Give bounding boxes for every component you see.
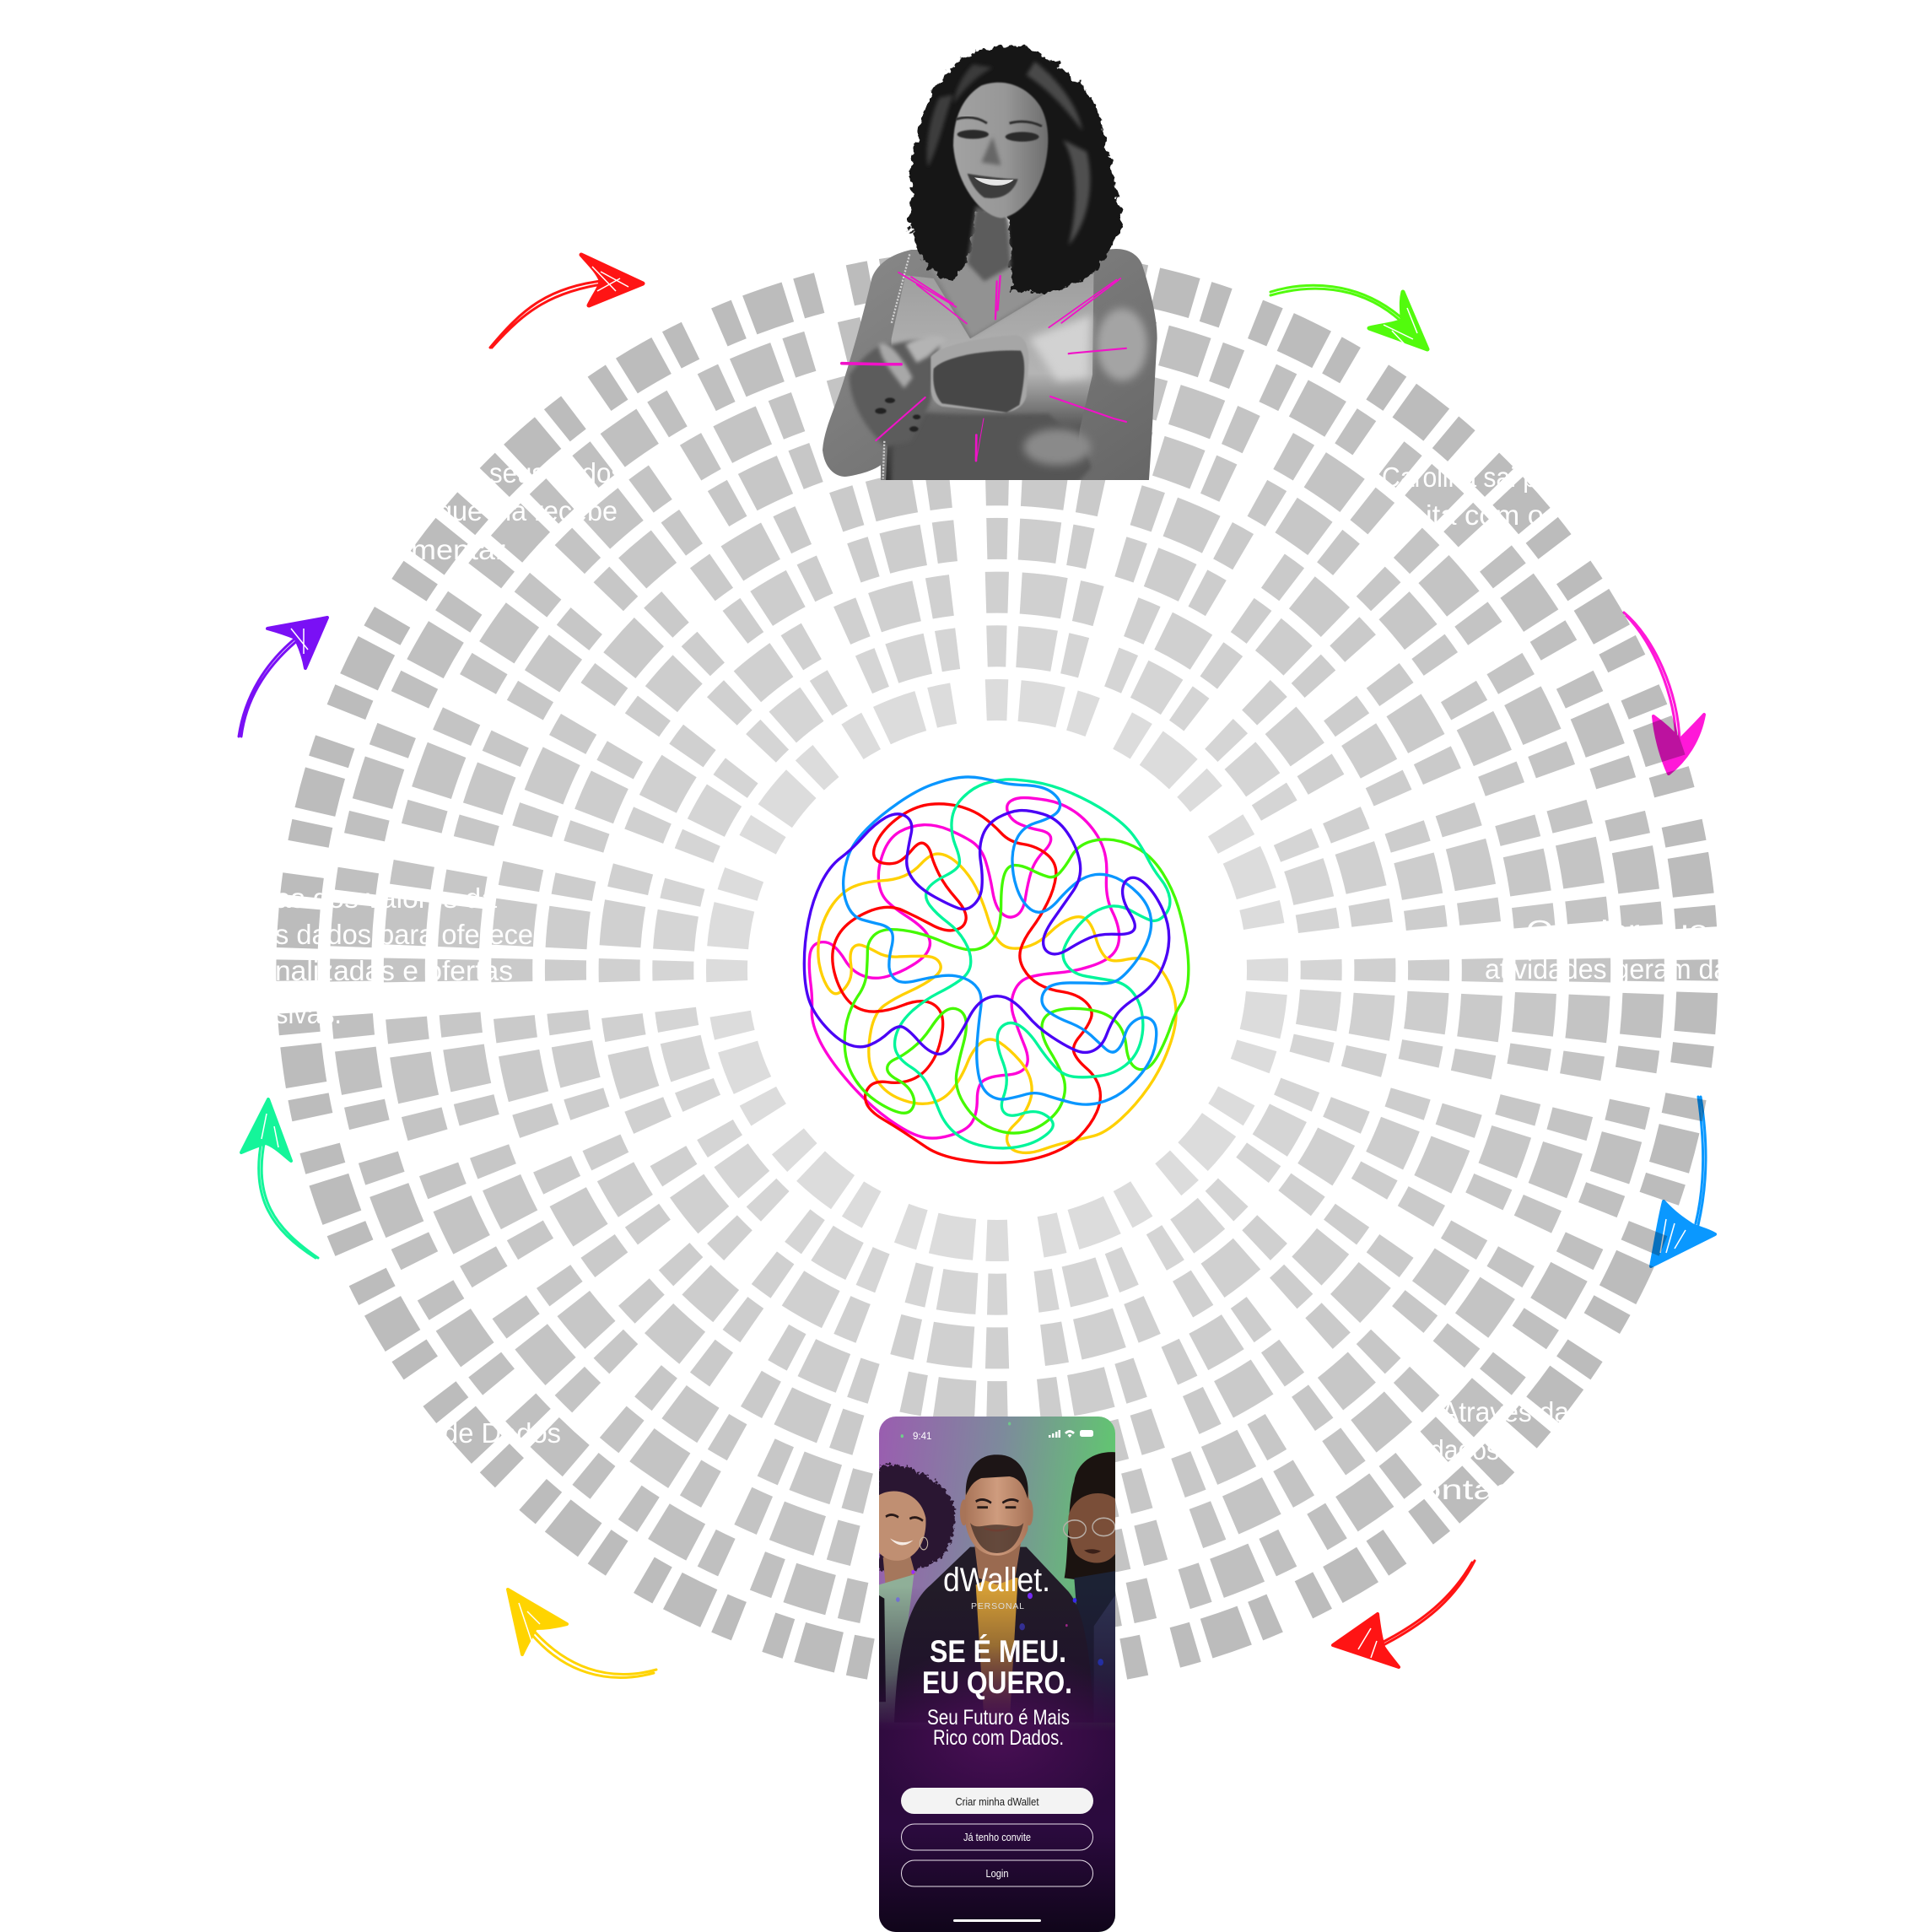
text block: top left: mentar. xyxy=(411,534,512,565)
subheadline: Rico com Dados. xyxy=(933,1726,1064,1750)
headline: EU QUERO. xyxy=(922,1665,1072,1700)
neck xyxy=(968,206,1011,282)
text block: top left: seus dados xyxy=(489,457,624,488)
mouth xyxy=(968,174,1018,198)
text block: left: s dados para oferece xyxy=(275,919,533,950)
left woman xyxy=(879,1465,955,1723)
man xyxy=(894,1454,1094,1723)
nose shade xyxy=(981,137,1001,165)
hair xyxy=(909,45,1122,291)
headline xyxy=(922,1634,1072,1700)
text block: right: atividades geram dados xyxy=(1485,953,1772,985)
text block: left: nalizadas e ofertas xyxy=(275,955,513,986)
dark fade overlay xyxy=(879,1586,1115,1932)
button: invite: Já tenho convite xyxy=(963,1832,1031,1843)
button: login: Login xyxy=(985,1868,1009,1880)
spark lines xyxy=(842,273,1126,461)
right arm light patch xyxy=(1097,309,1147,380)
radial tile wheel xyxy=(297,270,1697,1670)
fingers xyxy=(879,343,913,388)
person: woman looking at her phone xyxy=(823,45,1157,483)
text block: bottom right: Através da xyxy=(1441,1396,1570,1427)
text block: right xyxy=(1485,915,1772,985)
arrow: purple left xyxy=(239,618,327,737)
phone background xyxy=(879,1417,1115,1932)
arrow: magenta right xyxy=(1624,613,1704,774)
status bar icons xyxy=(1049,1430,1093,1438)
text block: top right: Carolina sai p xyxy=(1382,461,1537,493)
face xyxy=(953,83,1048,219)
arrow: yellow bottom left xyxy=(508,1589,656,1677)
button: invite xyxy=(901,1824,1093,1850)
eyes and brows xyxy=(956,117,1042,142)
arrow: green top right xyxy=(1270,285,1427,349)
purple glow xyxy=(854,1645,1141,1831)
lower hands xyxy=(892,411,1091,483)
subheadline xyxy=(927,1706,1070,1750)
photo of three people xyxy=(879,1422,1115,1723)
headline: SE É MEU. xyxy=(930,1634,1066,1669)
text block: left: sivas. xyxy=(275,998,342,1029)
phone mockup: dWallet screen xyxy=(854,1417,1141,1932)
button: create wallet: Criar minha dWallet xyxy=(955,1796,1039,1808)
sparkle dots xyxy=(896,1422,1103,1665)
text block: bottom right: ontad xyxy=(1420,1474,1516,1505)
left hand xyxy=(850,340,939,447)
text block: top right xyxy=(1382,461,1544,531)
logo subtitle: PERSONAL xyxy=(971,1601,1024,1611)
dress xyxy=(886,263,1094,483)
status bar time: 9:41 xyxy=(913,1432,931,1442)
phone xyxy=(931,335,1028,413)
text block: top left xyxy=(411,457,624,565)
text block: bottom left: de Dados xyxy=(443,1417,561,1449)
chest xyxy=(931,212,1044,337)
subheadline: Seu Futuro é Mais xyxy=(927,1706,1070,1730)
home indicator xyxy=(953,1919,1041,1922)
text block: bottom right: dados xyxy=(1430,1434,1499,1465)
right woman xyxy=(1064,1452,1115,1723)
arrow: spring green left xyxy=(241,1099,318,1258)
dress highlight xyxy=(1029,315,1091,380)
text block: left xyxy=(275,882,533,1029)
text block: left: as dos valores da xyxy=(275,882,498,914)
arrow: blue right xyxy=(1651,1097,1715,1266)
chain xyxy=(883,254,909,478)
logo dWallet: dWallet. xyxy=(943,1562,1050,1599)
text block: bottom right xyxy=(1420,1396,1570,1505)
wrist highlight xyxy=(1023,429,1091,465)
button: create wallet xyxy=(901,1788,1093,1814)
central tangled scribble xyxy=(804,777,1189,1163)
text block: top right: ita com o xyxy=(1426,499,1544,531)
text block: top left: que ela recebe xyxy=(437,495,618,526)
arrow: red top left xyxy=(490,255,643,348)
arrow: red bottom right xyxy=(1333,1561,1475,1667)
text block: right: O valor que xyxy=(1526,915,1708,946)
nails xyxy=(875,397,920,432)
body and arms xyxy=(823,249,1157,483)
button: login xyxy=(901,1860,1093,1886)
